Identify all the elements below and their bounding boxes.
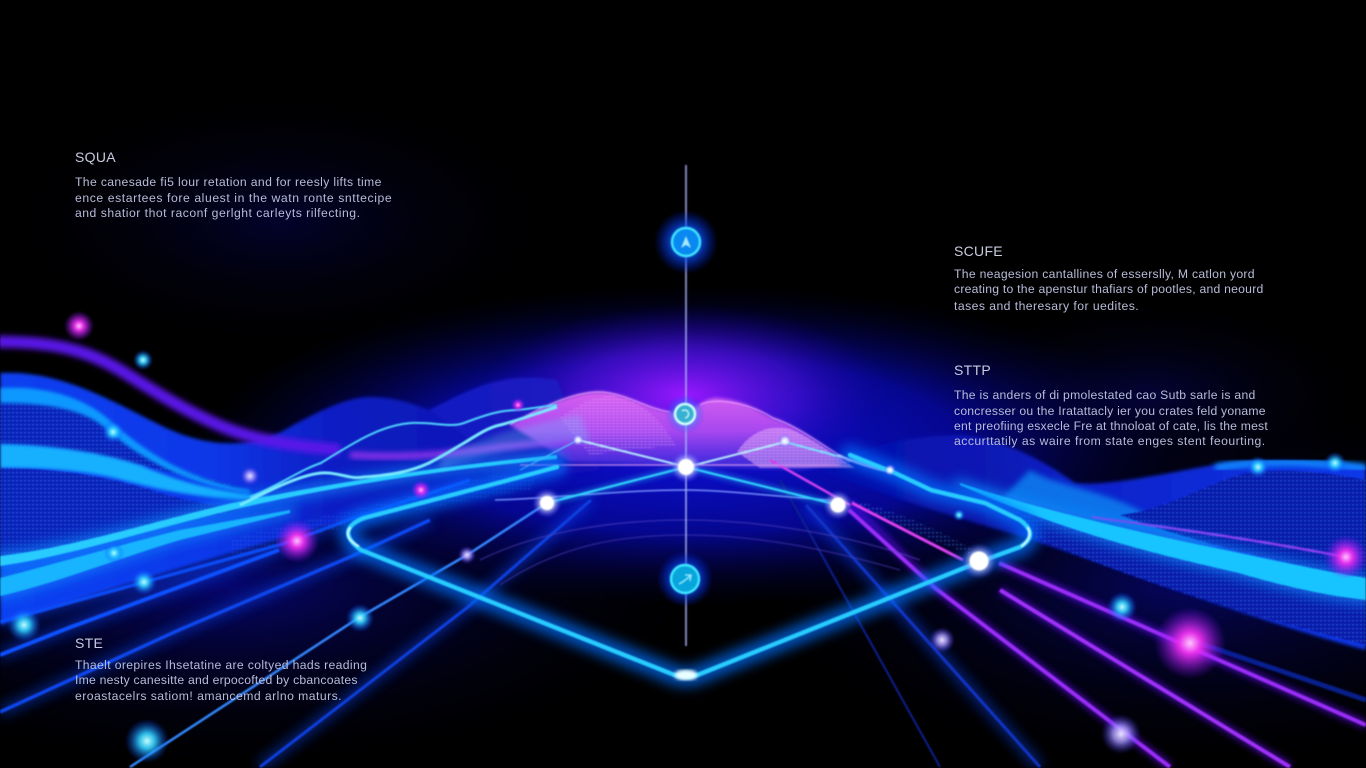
heading: SCUFE: SCUFE bbox=[954, 243, 1003, 259]
text block: STE bbox=[75, 635, 367, 703]
body: SQUA: The canesade fi5 lour retation and for reesly lifts time bbox=[75, 175, 382, 189]
icon node: lower bbox=[657, 551, 713, 607]
body: SQUA: ence estartees fore aluest in the watn ronte snttecipe bbox=[75, 191, 392, 205]
junction nodes bbox=[532, 434, 997, 579]
body: SQUA bbox=[75, 175, 392, 220]
body: STTP: accurttatily as waire from state enges stent feourting. bbox=[954, 434, 1266, 448]
body: STE bbox=[75, 658, 367, 703]
vertical axis line bbox=[685, 165, 687, 646]
central grid lines bbox=[495, 440, 895, 505]
body: STE: eroastacelrs satiom! amancemd arlno maturs. bbox=[75, 689, 342, 703]
right wave band bbox=[820, 435, 1366, 650]
heading: SQUA: SQUA bbox=[75, 149, 116, 165]
body: STTP: The is anders of di pmolestated cao Sutb sarle is and bbox=[954, 388, 1256, 402]
icon node: top bbox=[654, 210, 718, 274]
diamond outline bbox=[348, 455, 1030, 679]
body: SCUFE: creating to the apenstur thafiars of pootles, and neourd bbox=[954, 282, 1264, 296]
floating particles bbox=[7, 311, 1366, 763]
body: SCUFE: The neagesion cantallines of esserslly, M catlon yord bbox=[954, 267, 1255, 281]
heading: STTP: STTP bbox=[954, 362, 991, 378]
body: SCUFE: tases and theresary for uedites. bbox=[954, 299, 1139, 313]
text block: SQUA bbox=[75, 149, 392, 220]
body: STE: Thaelt orepires Ihsetatine are coltyed hads reading bbox=[75, 658, 367, 672]
text block: STTP bbox=[954, 362, 1268, 448]
body: STTP: concresser ou the Iratattacly ier you crates feld yoname bbox=[954, 404, 1266, 418]
body: STTP: ent preofiing esxecle Fre at thnoloat of cate, lis the mest bbox=[954, 419, 1268, 433]
body: SQUA: and shatior thot raconf gerlght carleyts rilfecting. bbox=[75, 206, 360, 220]
central magenta humps bbox=[510, 392, 855, 470]
right cyan stream bbox=[960, 483, 1366, 600]
heading: STE: STE bbox=[75, 635, 103, 651]
text block: SCUFE bbox=[954, 243, 1264, 313]
left cyan streams bbox=[0, 405, 590, 596]
body: SCUFE bbox=[954, 267, 1264, 313]
purple wave line bbox=[0, 342, 1345, 557]
icon node: middle bbox=[665, 394, 705, 434]
radiating floor lines bbox=[0, 460, 1366, 767]
body: STTP bbox=[954, 388, 1268, 448]
body: STE: Ime nesty canesitte and erpocofted by cbancoates bbox=[75, 673, 358, 687]
left wave band bbox=[0, 373, 600, 625]
